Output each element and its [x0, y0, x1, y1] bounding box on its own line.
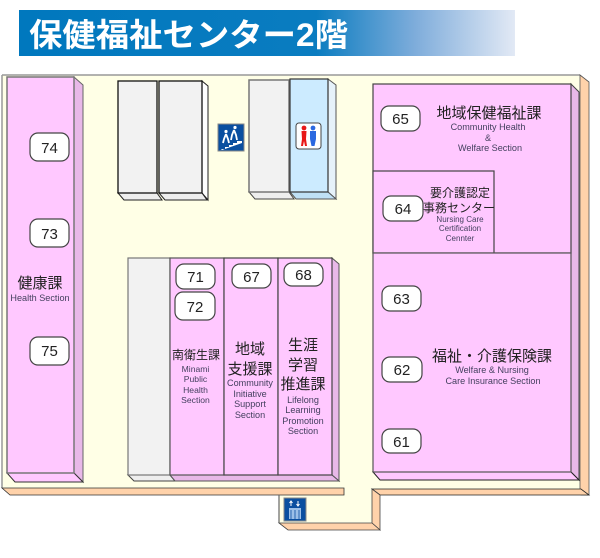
icon: restroom sign [296, 123, 321, 149]
label: Nursing Care Certification Center: 事務センター [423, 201, 495, 215]
label: Community Initiative Support Section: Section [235, 410, 265, 420]
label: Minami Public Health Section: Public [184, 374, 208, 384]
room number 67: 67 [243, 269, 260, 286]
room number 68 [284, 263, 323, 286]
room number 65: 65 [392, 111, 409, 128]
label: Minami Public Health Section: Health [183, 385, 208, 395]
label: Lifelong Learning Promotion Section: 推進課 [280, 376, 326, 393]
label: Lifelong Learning Promotion Section: 生涯 [288, 337, 318, 354]
room: Community Health and Welfare Section [373, 84, 571, 253]
label: Lifelong Learning Promotion Section: 学習 [288, 357, 318, 374]
icon: elevator [284, 498, 306, 521]
room number 73: 73 [41, 226, 58, 243]
room number 61 [382, 429, 421, 453]
label: Health Section [10, 275, 70, 303]
title banner: 保健福祉センター2階 [29, 17, 348, 53]
lower central block [128, 258, 339, 481]
label: Minami Public Health Section: 南衛生課 [172, 347, 220, 362]
room number 65 [381, 106, 420, 131]
label: Nursing Care Certification Center [423, 185, 495, 243]
room: Welfare and Nursing Care Insurance Section [373, 253, 571, 472]
room number 61: 61 [393, 434, 410, 451]
label: Nursing Care Certification Center: Cennter [446, 234, 475, 243]
label: Health Section: Health Section [10, 293, 70, 303]
room number 64: 64 [395, 201, 411, 218]
room number 75: 75 [41, 343, 58, 360]
label: Welfare and Nursing Care Insurance Section: 福祉・介護保険課 [432, 348, 552, 365]
label: Community Initiative Support Section: 支援課 [227, 361, 273, 378]
icon: stairs [218, 124, 244, 151]
room number 68: 68 [295, 267, 312, 284]
room: Lifelong Learning Promotion Section [278, 258, 332, 475]
label: Community Initiative Support Section: Support [234, 399, 266, 409]
room: Nursing Care Certification Center [373, 171, 495, 253]
right block [373, 84, 579, 480]
label: Minami Public Health Section: Minami [182, 364, 209, 374]
floor plan base [2, 75, 589, 530]
label: Community Initiative Support Section: Initiative [233, 389, 267, 399]
label: Community Health and Welfare Section: Welfare Section [458, 143, 522, 153]
label: Lifelong Learning Promotion Section: Promotion [282, 416, 324, 426]
label: Minami Public Health Section [172, 347, 220, 405]
room number 71: 71 [187, 269, 204, 286]
room number 74 [30, 133, 69, 161]
label: Community Health and Welfare Section: Community Health [451, 122, 525, 132]
label: Community Health and Welfare Section [436, 105, 542, 153]
room: Minami Public Health Section [170, 258, 224, 475]
label: Community Initiative Support Section [227, 341, 273, 420]
room number 73 [30, 219, 69, 247]
gray block: right of stairs [249, 80, 294, 199]
label: Community Health and Welfare Section: 地域保健福祉課 [436, 105, 542, 122]
room number 63 [382, 286, 421, 311]
label: Welfare and Nursing Care Insurance Section: Care Insurance Section [445, 376, 541, 386]
label: Lifelong Learning Promotion Section [280, 337, 326, 436]
room number 62: 62 [394, 362, 410, 379]
room number 72 [175, 292, 215, 320]
room number 62 [382, 357, 422, 382]
room number 72: 72 [187, 299, 203, 316]
label: Community Health and Welfare Section: & [485, 133, 491, 143]
label: Welfare and Nursing Care Insurance Section: Welfare & Nursing [455, 365, 529, 375]
label: Nursing Care Certification Center: Certification [439, 224, 481, 233]
room number 67 [232, 264, 271, 288]
gray blocks: left pair [118, 81, 208, 200]
room number 75 [30, 337, 69, 365]
restroom [290, 79, 336, 199]
label: Community Initiative Support Section: Community [227, 378, 273, 388]
label: Minami Public Health Section: Section [181, 395, 210, 405]
label: Lifelong Learning Promotion Section: Learning [285, 405, 321, 415]
label: Nursing Care Certification Center: Nursing Care [436, 215, 484, 224]
label: Lifelong Learning Promotion Section: Section [288, 426, 318, 436]
room: Health Section [7, 77, 83, 482]
room number 63: 63 [393, 291, 410, 308]
title banner [19, 10, 515, 56]
room: Community Initiative Support Section [224, 258, 278, 475]
label: Lifelong Learning Promotion Section: Lifelong [287, 395, 319, 405]
label: Welfare and Nursing Care Insurance Section [432, 348, 552, 386]
room number 71 [176, 264, 215, 289]
label: Health Section: 健康課 [17, 275, 63, 292]
label: Nursing Care Certification Center: 要介護認定 [430, 185, 490, 200]
label: Community Initiative Support Section: 地域 [235, 341, 265, 358]
room number 74: 74 [41, 140, 58, 157]
